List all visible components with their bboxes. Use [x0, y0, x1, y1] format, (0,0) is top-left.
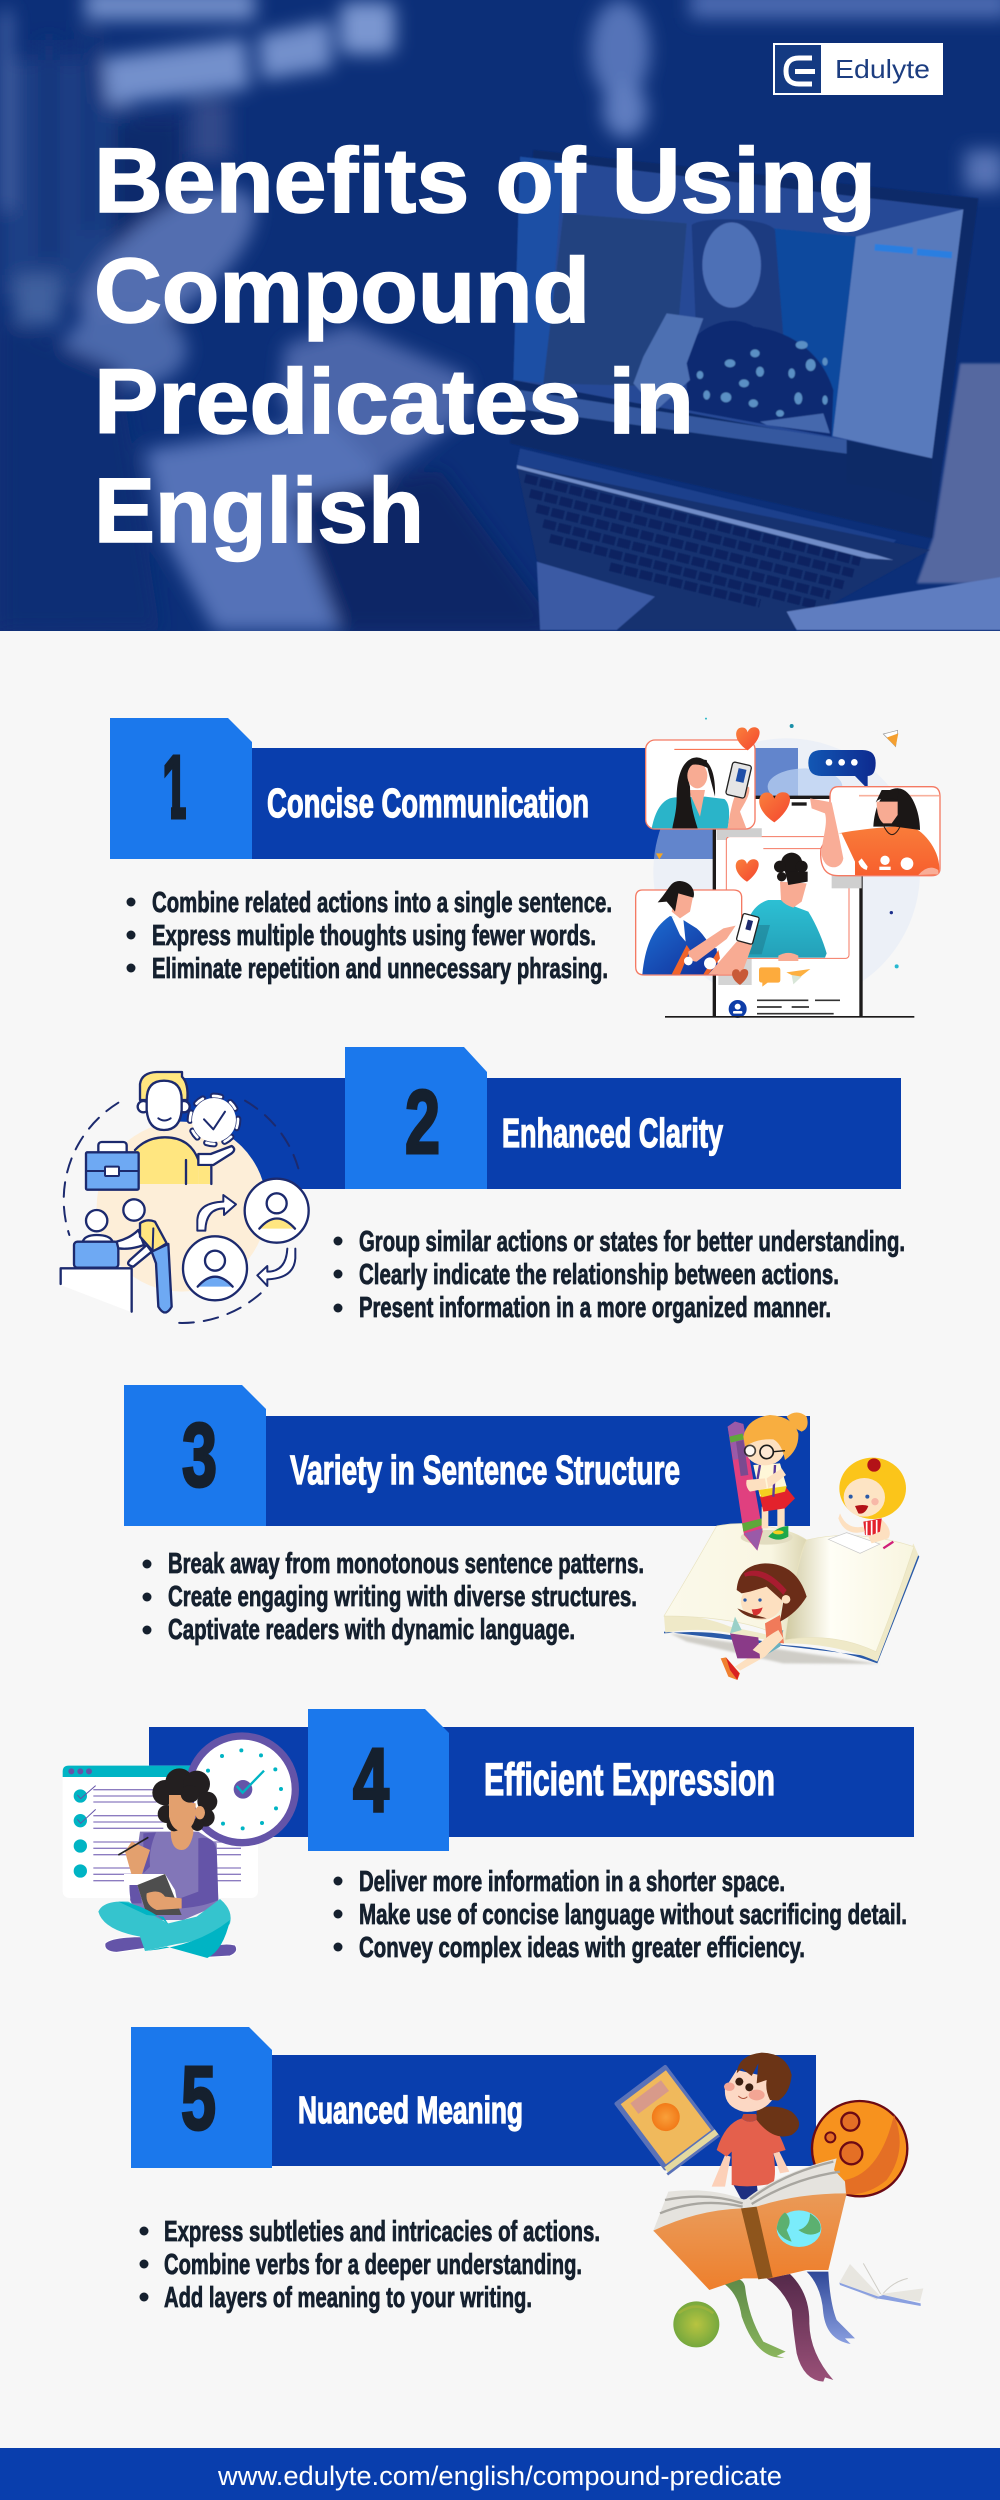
- bullet list 3: [142, 1548, 644, 1646]
- section 4 bar: [149, 1727, 914, 1837]
- bullet list 2: [334, 1226, 905, 1324]
- bullet list 4: Deliver more information in a shorter space.: [359, 1866, 785, 1898]
- illustration: children on open book: [664, 1412, 919, 1680]
- bullet list 5: Combine verbs for a deeper understanding.: [164, 2249, 582, 2281]
- bullet list 1: Express multiple thoughts using fewer words.: [152, 920, 596, 952]
- bullet list 3: Captivate readers with dynamic language.: [168, 1614, 575, 1646]
- number 3: 3: [182, 1406, 217, 1506]
- panel: section 2 enhanced clarity: [61, 1047, 905, 1324]
- bullet list 5: Add layers of meaning to your writing.: [164, 2282, 532, 2314]
- bullet list 5: Express subtleties and intricacies of actions.: [164, 2216, 600, 2248]
- heading: enhanced clarity: Enhanced Clarity: [502, 1110, 723, 1156]
- heading: efficient expression: Efficient Expression: [484, 1754, 775, 1805]
- panel: hero header: [0, 0, 1000, 631]
- bullet list 1: Combine related actions into a single sentence.: [152, 887, 612, 919]
- logo: Edulyte: [773, 43, 943, 95]
- panel: section 3 variety in sentence structure: [124, 1385, 919, 1680]
- title: Predicates in: [94, 351, 694, 453]
- heading: nuanced meaning: Nuanced Meaning: [298, 2090, 523, 2132]
- bullet list 4: [334, 1866, 907, 1964]
- bullet list 3: Create engaging writing with diverse structures.: [168, 1581, 637, 1613]
- number 4: 4: [353, 1731, 389, 1831]
- illustration: girl reading a flying book: [614, 2053, 923, 2382]
- logo: Edulyte: Edulyte: [835, 54, 930, 84]
- section 5 bar: [272, 2055, 816, 2166]
- bullet list 4: Convey complex ideas with greater efficiency.: [359, 1932, 805, 1964]
- title: Benefits of Using: [94, 130, 876, 232]
- section 5 number tab: [131, 2027, 272, 2168]
- footer bar: [0, 2448, 1000, 2500]
- bullet list 1: [126, 887, 612, 985]
- panel: section 5 nuanced meaning: [131, 2027, 923, 2382]
- title: [94, 130, 876, 562]
- hero background photo: [0, 0, 1000, 631]
- panel: section 4 efficient expression: [63, 1709, 914, 1964]
- panel: section 1 concise communication: [110, 718, 940, 1018]
- bullet list 5: [140, 2216, 600, 2314]
- bullet list 3: Break away from monotonous sentence patterns.: [168, 1548, 644, 1580]
- section 1 bar: [252, 748, 798, 859]
- title: English: [94, 460, 424, 562]
- section 2 number tab: [345, 1047, 487, 1189]
- illustration: woman with checklist and clock: [63, 1736, 295, 1958]
- number 5: 5: [181, 2049, 216, 2149]
- section 4 number tab: [308, 1709, 449, 1851]
- heading: variety in sentence structure: Variety in Sentence Structure: [290, 1447, 680, 1493]
- title: Compound: [94, 240, 590, 342]
- section 3 number tab: [124, 1385, 266, 1526]
- section 1 number tab: [110, 718, 252, 859]
- illustration: social video chat: [636, 718, 940, 1018]
- illustration: team workflow: [61, 1072, 309, 1323]
- number 2: 2: [405, 1073, 440, 1173]
- section 2 bar: [178, 1078, 901, 1189]
- heading: concise communication: Concise Communication: [267, 780, 589, 826]
- bullet list 1: Eliminate repetition and unnecessary phrasing.: [152, 953, 608, 985]
- section 3 bar: [266, 1416, 810, 1526]
- laptop: [510, 150, 1000, 630]
- number 1: 1: [162, 738, 188, 838]
- footer url: www.edulyte.com/english/compound-predicate: [217, 2461, 782, 2491]
